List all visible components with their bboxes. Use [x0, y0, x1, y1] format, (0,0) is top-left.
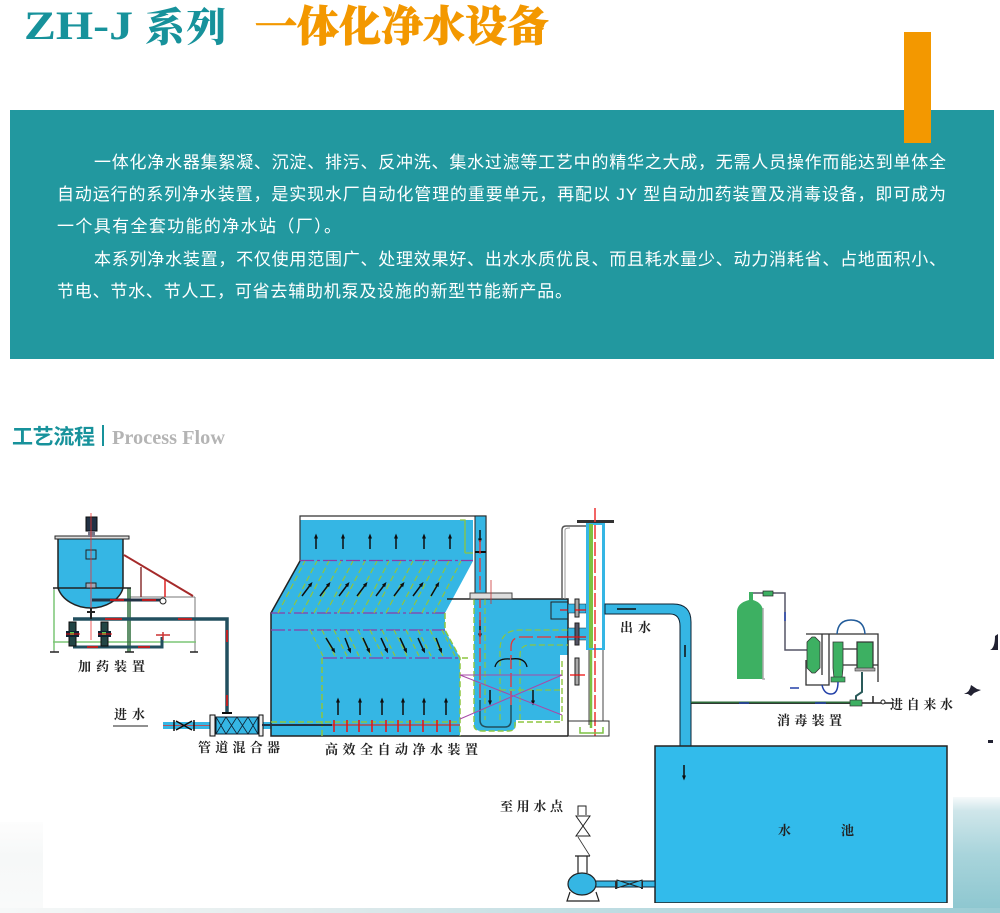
- main purification unit: [262, 508, 614, 757]
- supply pump and valves: [500, 799, 655, 901]
- label: 加药装置: [78, 659, 145, 674]
- support strut: [124, 555, 193, 596]
- process flow diagram: [50, 508, 998, 903]
- label: 管道混合器: [198, 740, 280, 755]
- background wash: bottom strip: [0, 908, 1000, 913]
- reactors: [807, 637, 820, 673]
- paragraph text: [57, 153, 946, 301]
- lower connections: [822, 682, 838, 694]
- bypass: [562, 526, 586, 599]
- title: [24, 3, 549, 51]
- water line: [691, 702, 850, 704]
- inlet valve: [174, 720, 194, 731]
- metering pumps: [66, 622, 170, 646]
- chamber centre pipe: [480, 700, 511, 727]
- paragraph text: 一体化净水器集絮凝、沉淀、排污、反冲洗、集水过滤等工艺中的精华之大成，无需人员操作而能达到单体全: [94, 153, 946, 172]
- clear water pool: [655, 746, 947, 903]
- gas cylinder: [737, 592, 763, 679]
- dosing device: [50, 513, 227, 713]
- green dashed outlines: [271, 613, 470, 736]
- inclined plates upper: [278, 561, 461, 613]
- paragraph text: 自动运行的系列净水装置，是实现水厂自动化管理的重要单元，再配以 JY 型自动加药装置及消毒设备，即可成为: [57, 185, 946, 204]
- disinfection device: 消毒装置: [777, 713, 842, 728]
- flow arrows: [302, 530, 533, 715]
- curved deflector arrows: [495, 659, 527, 667]
- top fitting: [470, 593, 512, 599]
- title: 一体化净水设备: [255, 4, 549, 51]
- label: pool: 水: [778, 823, 791, 838]
- lower sump: [568, 721, 609, 736]
- intro panel: [10, 110, 994, 359]
- dashed purple lines: [271, 560, 473, 658]
- right chamber: [474, 599, 568, 731]
- tank body: [271, 520, 473, 736]
- bird decoration: [964, 634, 998, 743]
- outlet valve: [576, 816, 590, 836]
- dosing tank: [58, 538, 123, 608]
- suction pipe: [595, 881, 655, 887]
- small outlet box: [551, 602, 568, 619]
- suction valve: [616, 881, 642, 889]
- unit frame: [806, 634, 878, 685]
- dosing pipes: [92, 598, 163, 602]
- background wash: bottom-right: [953, 797, 1000, 913]
- mixer body: [216, 717, 258, 734]
- inclined plates lower: [310, 630, 456, 658]
- inlet label: 进水: [114, 707, 145, 722]
- disinfection device: [691, 591, 953, 728]
- section heading: 工艺流程: [12, 426, 95, 449]
- lower column: [589, 650, 603, 725]
- label: 至用水点: [500, 799, 564, 814]
- section heading: [12, 425, 225, 449]
- title: ZH-J: [24, 3, 133, 48]
- section heading: Process Flow: [112, 428, 225, 449]
- purple cross lines: [460, 675, 562, 719]
- label: 出水: [620, 620, 651, 635]
- orange accent bar: [904, 32, 931, 143]
- pump: [568, 873, 596, 895]
- inlet and static mixer: [113, 707, 280, 755]
- label: pool: 池: [841, 823, 854, 838]
- inlet pipe: [163, 722, 271, 729]
- motor: [86, 517, 97, 531]
- paragraph text: 一个具有全套功能的净水站（厂）。: [57, 217, 341, 236]
- labels: 进自来水: [890, 697, 953, 712]
- downcomer: [475, 516, 486, 599]
- label: 高效全自动净水装置: [325, 742, 478, 757]
- arc tube: [837, 620, 865, 634]
- paragraph text: 节电、节水、节人工，可省去辅助机泵及设施的新型节能新产品。: [57, 282, 572, 301]
- gas line: [753, 593, 807, 650]
- flanges: [568, 604, 593, 640]
- background wash: bottom-left: [0, 822, 43, 908]
- support frame: [54, 588, 195, 652]
- inlet distribution pipe: [262, 724, 332, 726]
- title: 系列: [145, 5, 226, 50]
- outlet column: [586, 523, 605, 650]
- label: pool: [778, 823, 854, 838]
- outlet pipe: [605, 604, 691, 746]
- paragraph text: 本系列净水装置，不仅使用范围广、处理效果好、出水水质优良、而且耗水量少、动力消耗省、占地面积小、: [94, 249, 946, 269]
- pump riser: [575, 856, 590, 873]
